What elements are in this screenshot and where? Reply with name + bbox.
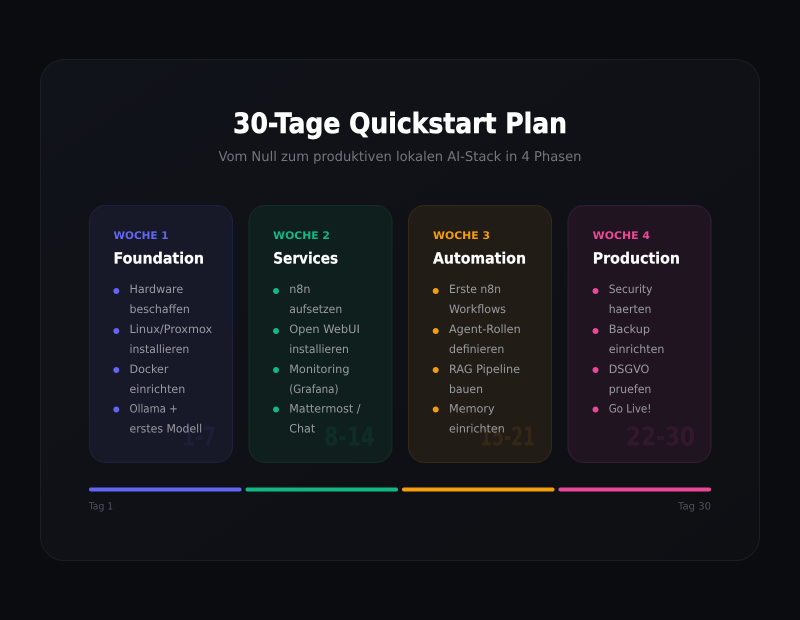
list item: n8n aufsetzen <box>273 282 342 316</box>
list item: Monitoring (Grafana): Monitoring <box>289 362 350 376</box>
list item: Docker einrichten: Docker <box>130 362 169 376</box>
list item: Monitoring (Grafana): (Grafana) <box>289 382 338 396</box>
timeline start label: Tag 1 <box>88 502 113 512</box>
list item: Security haerten: haerten <box>609 302 651 316</box>
card heading: Production <box>593 250 680 268</box>
card heading: Foundation <box>114 250 204 268</box>
card heading: Automation <box>433 250 526 268</box>
list item: RAG Pipeline bauen: bauen <box>449 382 483 396</box>
list item: DSGVO pruefen: DSGVO <box>609 362 649 376</box>
list item: Mattermost / Chat <box>273 402 361 436</box>
week label: WOCHE 1 <box>114 230 168 242</box>
list item: Hardware beschaffen <box>113 282 190 316</box>
list item: Open WebUI installieren: installieren <box>289 342 349 356</box>
card: Woche 4 Production <box>568 206 711 462</box>
watermark: days 22-30: 22-30 <box>626 422 695 452</box>
list item: Erste n8n Workflows: Workflows <box>449 302 506 316</box>
list item: RAG Pipeline bauen <box>433 362 520 396</box>
watermark: days 8-14: 8-14 <box>324 422 375 452</box>
list item: DSGVO pruefen: pruefen <box>609 382 651 396</box>
watermark: days 1-7: 1-7 <box>182 422 216 452</box>
title: 30-Tage Quickstart Plan <box>233 107 567 140</box>
list item: Erste n8n Workflows <box>433 282 506 316</box>
list item: Open WebUI installieren <box>273 322 360 356</box>
list item: Hardware beschaffen: beschaffen <box>130 302 190 316</box>
week label: WOCHE 3 <box>433 230 490 242</box>
card heading: Services <box>273 250 338 268</box>
list item: Ollama + erstes Modell: erstes Modell <box>130 422 202 436</box>
card: Woche 3 Automation <box>408 206 552 462</box>
list item: Erste n8n Workflows: Erste n8n <box>449 282 501 296</box>
list item: Monitoring (Grafana) <box>273 362 350 396</box>
list item: Mattermost / Chat: Mattermost / <box>289 402 361 416</box>
list item: Linux/Proxmox installieren: installieren <box>130 342 189 356</box>
list item: Open WebUI installieren: Open WebUI <box>289 322 360 336</box>
list item: Agent-Rollen definieren: definieren <box>449 342 504 356</box>
list item: Ollama + erstes Modell: Ollama + <box>130 402 178 416</box>
list item: n8n aufsetzen: n8n <box>289 282 310 296</box>
list item: Security haerten: Security <box>609 282 653 296</box>
list item: Linux/Proxmox installieren: Linux/Proxmox <box>130 322 212 336</box>
list item: Memory einrichten: Memory <box>449 402 495 416</box>
list item: Linux/Proxmox installieren <box>113 322 212 356</box>
list item: Mattermost / Chat: Chat <box>289 422 316 436</box>
list item: Backup einrichten <box>592 322 664 356</box>
list item: Agent-Rollen definieren <box>433 322 521 356</box>
list item: Backup einrichten: Backup <box>609 322 650 336</box>
main panel <box>40 60 760 560</box>
list item: Memory einrichten: einrichten <box>449 422 505 436</box>
list item: Agent-Rollen definieren: Agent-Rollen <box>449 322 521 336</box>
timeline end label: Tag 30 <box>677 502 711 512</box>
list item: Go Live!: Go Live! <box>609 402 651 416</box>
list item: Docker einrichten <box>113 362 185 396</box>
week label: WOCHE 4 <box>593 230 650 242</box>
timeline progress bar <box>89 488 711 492</box>
list item: Docker einrichten: einrichten <box>130 382 185 396</box>
list item: Hardware beschaffen: Hardware <box>130 282 183 296</box>
card: Woche 2 Services <box>249 206 392 462</box>
week label: WOCHE 2 <box>273 230 330 242</box>
list item: Security haerten <box>592 282 653 316</box>
watermark: days 15-21: 15-21 <box>480 422 535 452</box>
card: Woche 1 Foundation <box>90 206 232 462</box>
list item: Memory einrichten <box>433 402 505 436</box>
list item: DSGVO pruefen <box>592 362 651 396</box>
list item: n8n aufsetzen: aufsetzen <box>289 302 342 316</box>
list item: RAG Pipeline bauen: RAG Pipeline <box>449 362 520 376</box>
subtitle: Vom Null zum produktiven lokalen AI-Stack in 4 Phasen <box>218 149 582 165</box>
list item: Ollama + erstes Modell <box>113 402 202 436</box>
list item: Go Live! <box>592 402 651 416</box>
list item: Backup einrichten: einrichten <box>609 342 664 356</box>
